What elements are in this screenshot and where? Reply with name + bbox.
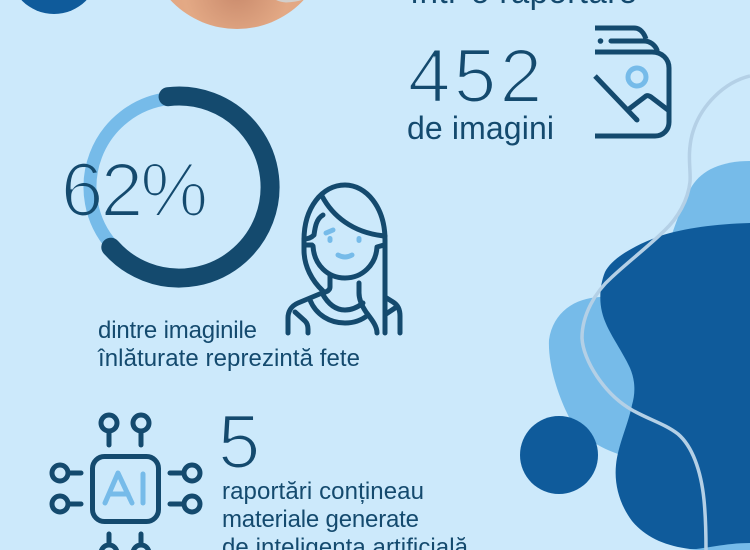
text: AI reports line 1: raportări conțineau: [222, 478, 424, 505]
decorative circle: top left: [9, 0, 99, 14]
icon: girl: [288, 185, 400, 333]
decorative blob: dark right: [600, 223, 750, 550]
icon: image gallery: [595, 28, 669, 136]
text: inlaturate reprezinta fete: înlăturate reprezintă fete: [97, 345, 360, 372]
text: de imagini: de imagini: [407, 110, 554, 146]
text: AI reports line 2: materiale generate: [222, 506, 419, 533]
stat: 62%: 62%: [61, 148, 208, 233]
decorative blob: light left: [549, 297, 650, 456]
icon: AI chip: [52, 415, 200, 550]
text: dintre imaginile: dintre imaginile: [98, 317, 257, 344]
stat: 5: 5: [218, 400, 260, 485]
photo: cropped face: [146, 0, 328, 29]
donut chart: 62%: [90, 96, 270, 278]
decorative blob: light top right: [670, 161, 750, 250]
decorative circle: lower: [520, 416, 598, 494]
stat: 452: 452: [408, 34, 542, 119]
decorative blob: light bottom right: [685, 543, 750, 550]
decorative curved line: [582, 76, 750, 550]
